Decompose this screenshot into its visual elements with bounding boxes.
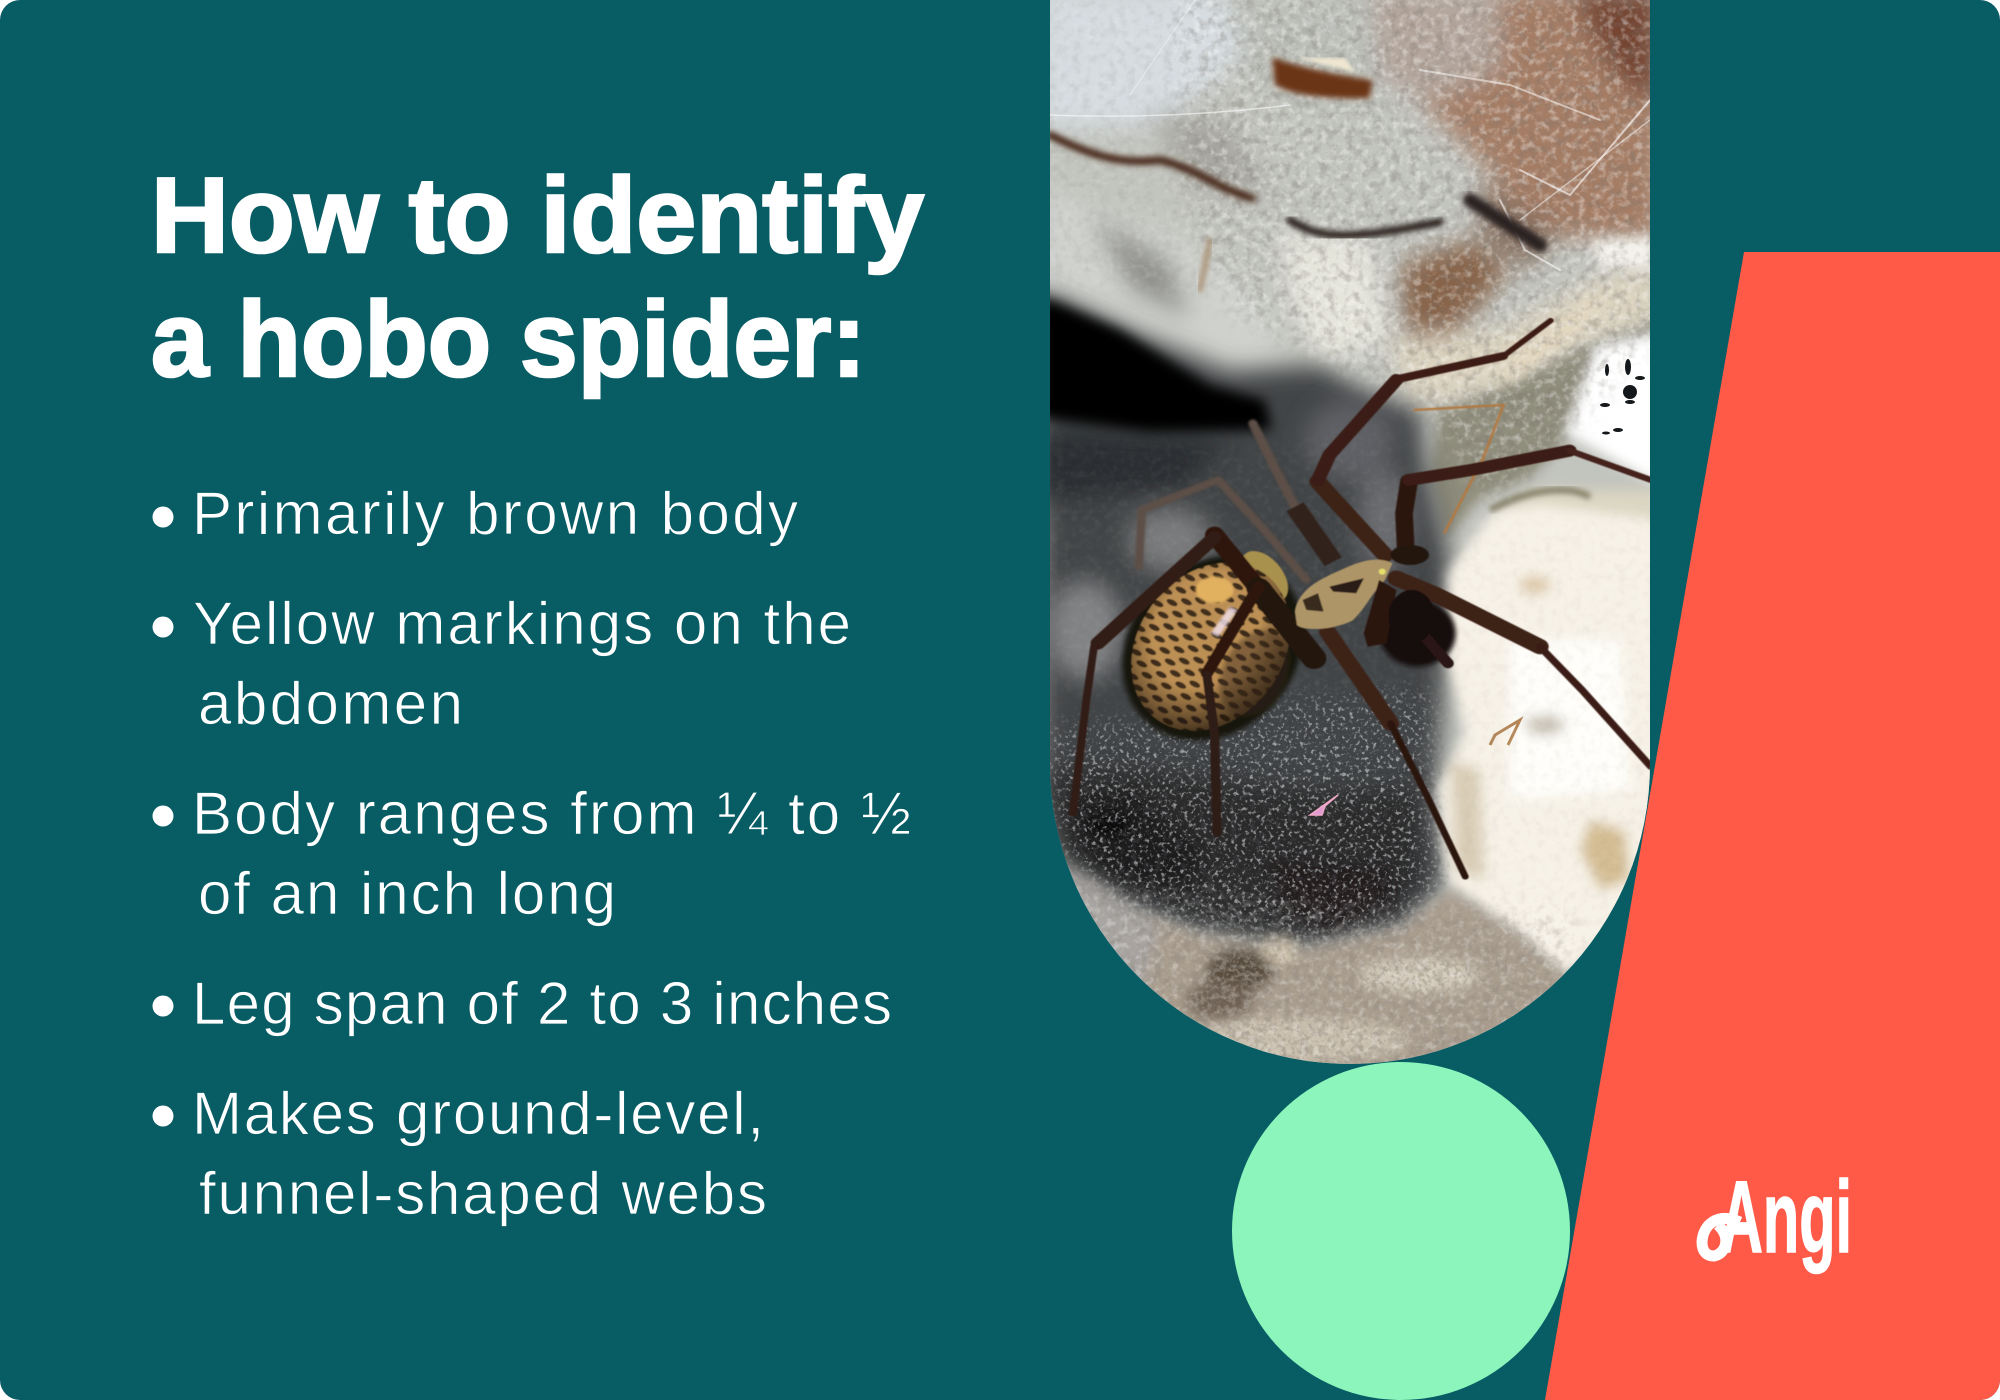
- photo: hobo spider on a web: [1040, 0, 1660, 1080]
- pink web glint: [1310, 795, 1338, 815]
- cephalothorax: [1295, 560, 1393, 629]
- rust slit in bark: [1272, 57, 1372, 98]
- title: [151, 155, 924, 399]
- blurred rear legs: [1139, 423, 1306, 580]
- coral angled panel: [1545, 252, 2000, 1400]
- legs: [1073, 321, 1651, 877]
- bullet: webs: Makes ground-level,: [192, 1080, 764, 1147]
- bullet list: [152, 480, 911, 1227]
- spider: [1073, 321, 1651, 877]
- pale abdomen top: [1242, 550, 1289, 599]
- bullet: yellow markings: [152, 590, 851, 737]
- title: a hobo spider:: [151, 279, 866, 399]
- fangs and mouthparts: [1364, 580, 1396, 647]
- abdomen: [1130, 562, 1290, 732]
- bullet: webs: funnel-shaped webs: [199, 1160, 767, 1227]
- dark web patches: [1050, 770, 1420, 935]
- tan debris at bottom: [1068, 868, 1568, 1064]
- dark cavity and web area: [1040, 290, 1450, 945]
- bullet: yellow markings: abdomen: [198, 670, 463, 737]
- bullet: brown body: Primarily brown body: [192, 480, 798, 547]
- bullet: webs: [152, 1080, 767, 1227]
- web strands: [1050, 0, 1650, 270]
- mouth shadow: [1379, 600, 1456, 667]
- bark cracks: [1050, 135, 1540, 290]
- bullet: body size: Body ranges from ¼ to ½: [192, 780, 911, 847]
- Angi logo: [1702, 1160, 1852, 1274]
- cream wall: [1436, 488, 1660, 975]
- abdomen shadow: [1120, 554, 1301, 743]
- bullet: leg span: Leg span of 2 to 3 inches: [192, 970, 892, 1037]
- mint circle: [1232, 1062, 1570, 1400]
- bullet: yellow markings: Yellow markings on the: [193, 590, 851, 657]
- bullet: body size: of an inch long: [198, 860, 616, 927]
- Angi logo: Angi: [1720, 1160, 1852, 1274]
- orange hair strands: [1414, 405, 1503, 533]
- title: How to identify: [151, 155, 924, 275]
- bullet: body size: [152, 780, 911, 927]
- texture noise: [1050, 0, 1650, 1064]
- small insects on white patch: [1600, 359, 1645, 434]
